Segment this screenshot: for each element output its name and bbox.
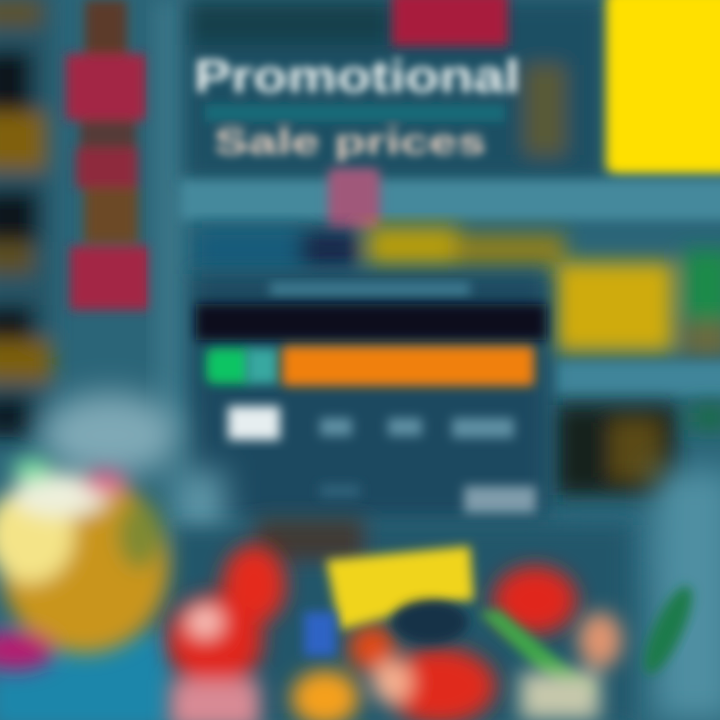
title: Promotional [194, 50, 520, 102]
green progress segment [206, 348, 250, 384]
lower shelf [556, 362, 720, 396]
icon: red apple right [493, 566, 577, 634]
icon: dark plum [392, 600, 468, 644]
lower right products [556, 405, 720, 495]
shopping bag haze [40, 393, 720, 720]
bottom produce basket [0, 518, 630, 720]
yellow panel [606, 0, 720, 174]
icon: yellow package [326, 546, 474, 630]
icon: melon and fruit left [0, 458, 169, 670]
orange progress segment [282, 346, 534, 386]
icon: pale produce right [520, 612, 622, 720]
icon: tomatoes centre [167, 545, 496, 720]
top back panel [185, 0, 605, 180]
left shelves [0, 0, 52, 437]
lower note [320, 484, 536, 514]
red top sign [392, 0, 508, 46]
yellow product box [555, 250, 720, 356]
stats row [228, 406, 514, 440]
red hanging tags [66, 0, 150, 310]
icon: green leaf stripe [478, 610, 595, 700]
upper shelf [180, 180, 720, 220]
pink hanging tag [328, 168, 380, 230]
black bar [196, 304, 546, 340]
column [155, 0, 185, 430]
title: Sale prices [214, 121, 486, 162]
icon: green bag leaf [635, 581, 701, 679]
icon: blue item [304, 612, 336, 656]
display panel [192, 274, 548, 520]
title [194, 50, 520, 162]
panel heading [270, 282, 470, 296]
middle shelf products [195, 226, 565, 270]
